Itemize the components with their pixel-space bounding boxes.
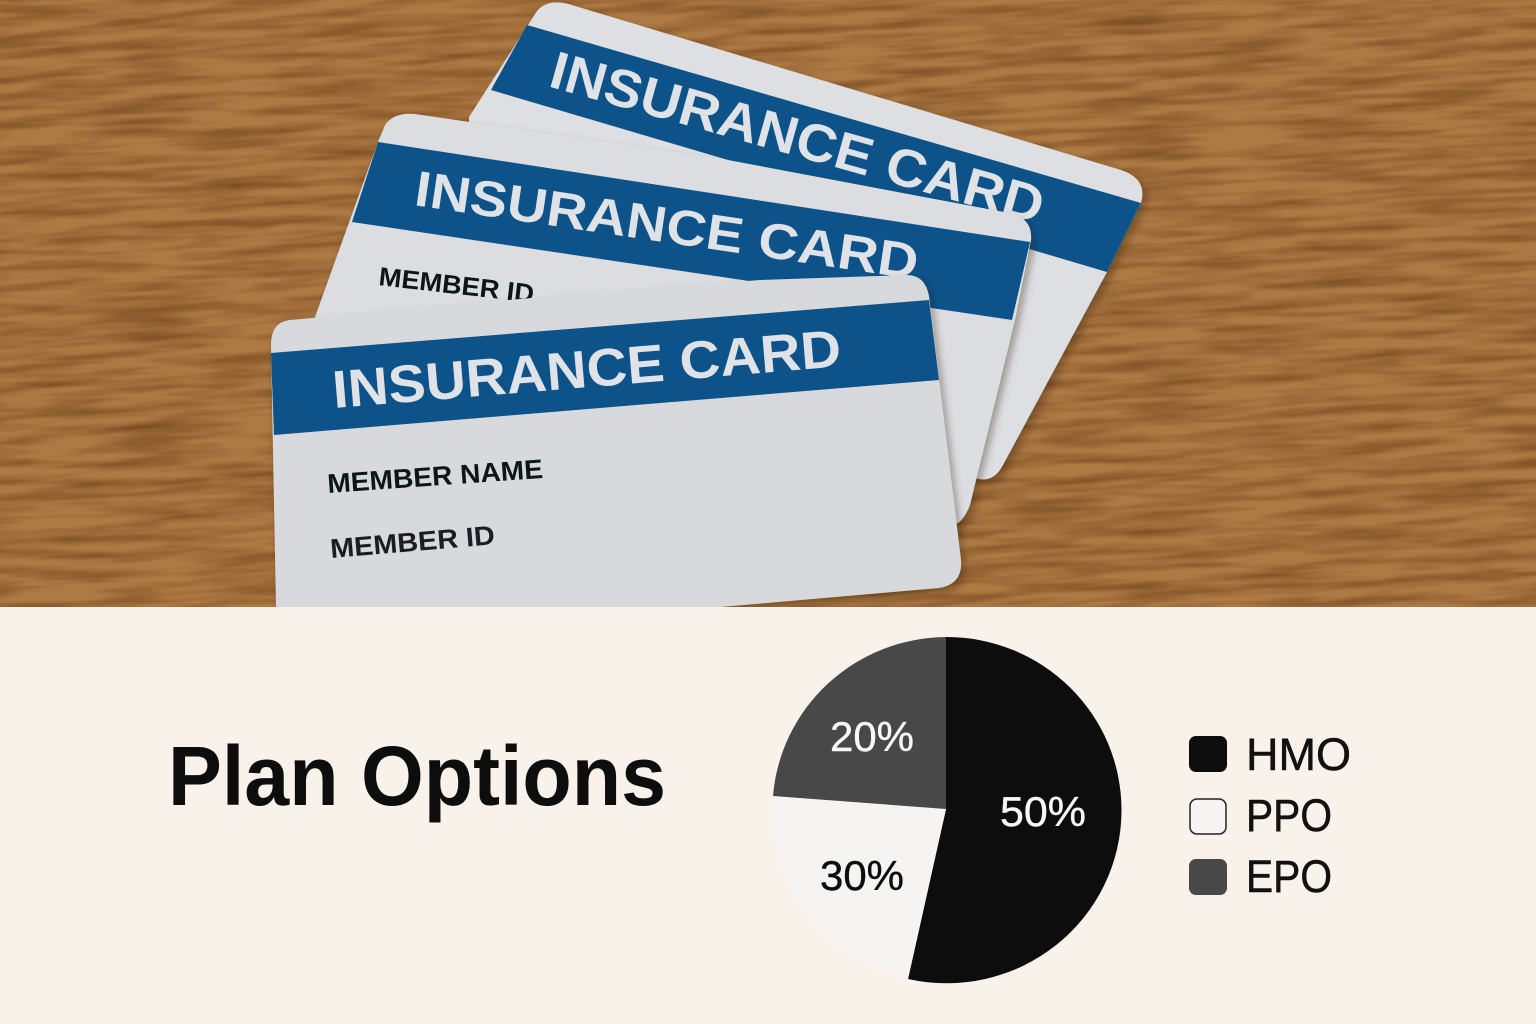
slice: HMO 50% bbox=[908, 637, 1122, 983]
label: 20%: 20% bbox=[830, 713, 914, 760]
photo: wooden table bbox=[0, 0, 1536, 607]
label: 50%: 50% bbox=[1000, 788, 1086, 835]
back card: INSURANCE CARD bbox=[544, 41, 1051, 236]
front card: INSURANCE CARD bbox=[330, 319, 843, 420]
heading: Plan Options bbox=[168, 729, 666, 823]
middle card: INSURANCE CARD bbox=[411, 160, 922, 290]
bottom panel bbox=[0, 607, 1536, 1024]
front card bbox=[271, 275, 961, 607]
legend item: EPO bbox=[1189, 851, 1332, 902]
back card bbox=[469, 2, 1142, 479]
legend item: EPO: EPO bbox=[1246, 851, 1332, 902]
front card: MEMBER NAME bbox=[326, 454, 544, 499]
legend item: HMO bbox=[1189, 729, 1351, 780]
legend item: PPO bbox=[1190, 790, 1332, 841]
slice: PPO 30% bbox=[772, 796, 946, 979]
slice: EPO 20% bbox=[773, 637, 946, 809]
pie chart bbox=[772, 637, 1122, 983]
insurance cards stack bbox=[271, 2, 1142, 607]
middle card bbox=[314, 114, 1038, 532]
legend item: HMO: HMO bbox=[1246, 729, 1351, 780]
legend item: PPO: PPO bbox=[1246, 790, 1332, 841]
label: 30%: 30% bbox=[820, 852, 904, 899]
legend bbox=[1189, 729, 1351, 902]
front card: MEMBER ID bbox=[329, 520, 496, 564]
middle card: MEMBER ID bbox=[377, 261, 536, 309]
